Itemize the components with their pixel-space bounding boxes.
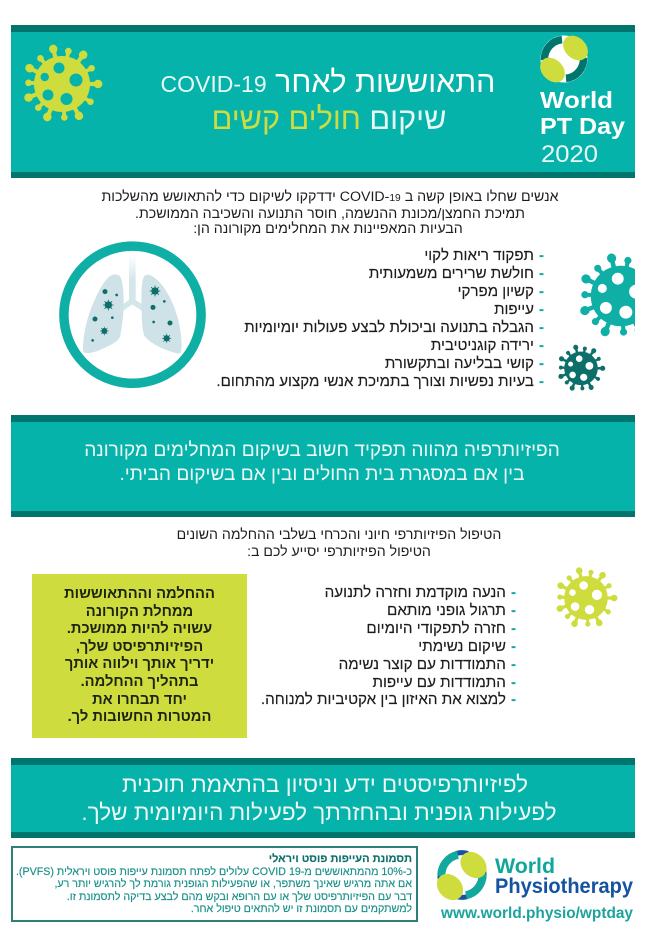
list: typical problems: [216, 247, 544, 390]
icon: yellow virus: [24, 44, 102, 122]
text block: introduction: תמיכת החמצן/מכונת ההנשמה, חוסר התנועה והשכיבה הממושכת.: [135, 206, 525, 222]
text block: physiotherapy is vital: הטיפול הפיזיותרפי יסייע לכם ב:: [247, 543, 431, 559]
list: typical problems: -קשיון מפרקי: [458, 283, 544, 300]
callout text: ידריך אותך וילווה אותך: [65, 656, 214, 672]
note heading: תסמונת העייפות פוסט ויראלי: [269, 853, 412, 865]
list: how physiotherapy helps: -התמודדות עם קוצר נשימה: [339, 656, 516, 673]
callout: green recovery box: [32, 574, 247, 738]
logo: World PT Day 2020: 2020: [541, 141, 598, 168]
list: how physiotherapy helps: -חזרה לתפקודי היומיום: [366, 620, 516, 637]
text: physiotherapy role statement: הפיזיותרפיה מהווה תפקיד חשוב בשיקום המחלימים מקורונה: [84, 440, 560, 461]
note body: כ-10% מהמתאוששים מ-19 COVID עלולים לפתח תסמונת עייפות פוסט ויראלית (PVFS).: [16, 866, 412, 878]
callout text: ממחלת הקורונה: [86, 604, 193, 620]
callout text: הפיזיותרפיסט שלך,: [76, 639, 203, 655]
title line: recovery after COVID-19: התאוששות לאחר COVID-19: [161, 65, 495, 99]
logo: World Physiotherapy: [436, 850, 633, 922]
logo: World PT Day 2020: [540, 36, 625, 168]
list: typical problems: -קושי בבליעה ובתקשורת: [385, 355, 544, 372]
list: typical problems: -הגבלה בתנועה וביכולת לבצע פעולות יומיומיות: [244, 319, 544, 336]
text block: introduction: [101, 189, 559, 237]
callout text: [64, 586, 215, 725]
text: physiotherapy role statement: בין אם במסגרת בית החולים ובין אם בשיקום הביתי.: [119, 464, 525, 484]
logo: World PT Day 2020: World: [540, 87, 613, 113]
text: physiotherapy role statement: [84, 440, 560, 484]
icon: lungs in a circle: [59, 241, 206, 388]
callout text: יחד תבחרו את: [92, 692, 187, 708]
panel: header band: [11, 25, 635, 178]
list: typical problems: -חולשת שרירים משמעותית: [369, 265, 544, 282]
text block: physiotherapy is vital: [177, 526, 501, 559]
list: how physiotherapy helps: [261, 584, 516, 708]
logo: World PT Day 2020: PT Day: [540, 113, 625, 139]
list: how physiotherapy helps: -שיקום נשימתי: [418, 638, 516, 655]
text: knowledge statement: [81, 772, 557, 825]
text block: physiotherapy is vital: הטיפול הפיזיותרפי חיוני והכרחי בשלבי ההחלמה השונים: [177, 526, 501, 542]
list: typical problems: -בעיות נפשיות וצורך בתמיכת אנשי מקצוע מהתחום.: [216, 373, 544, 390]
logo: World Physiotherapy: www.world.physio/wptday: [440, 905, 633, 922]
logo: World Physiotherapy: World: [495, 855, 555, 878]
note body: אם אתה מרגיש שאינך משתפר, או שהפעילות הגופנית גורמת לך להרגיש יותר רע,: [54, 878, 412, 890]
text block: introduction: אנשים שחלו באופן קשה ב COVID-19 ידדקקו לשיקום כדי להתאושש מהשלכות: [101, 189, 559, 205]
list: how physiotherapy helps: -התמודדות עם עייפות: [372, 674, 516, 691]
note body: למשתקמים עם תסמונת זו יש להתאים טיפול אחר.: [191, 903, 412, 915]
logo: World Physiotherapy: Physiotherapy: [495, 875, 633, 898]
list: how physiotherapy helps: -תרגול גופני מותאם: [387, 602, 516, 619]
note body: דבר עם הפיזיותרפיסט שלך או עם הרופא ובקש מהם לבצע בדיקה לתסמונת זו.: [67, 891, 412, 903]
list: typical problems: -עייפות: [494, 301, 544, 318]
callout text: המטרות החשובות לך.: [68, 709, 211, 725]
note body: [16, 866, 412, 915]
list: typical problems: -תפקוד ריאות לקוי: [424, 247, 544, 264]
callout text: עשויה להיות ממושכת.: [67, 621, 212, 637]
icon: small yellow virus: [556, 567, 618, 628]
list: typical problems: -ירידה קוגניטיבית: [431, 337, 544, 354]
text: knowledge statement: לפיזיותרפיסטים ידע וניסיון בהתאמת תוכנית: [122, 772, 528, 797]
callout text: ההחלמה וההתאוששות: [64, 586, 215, 602]
panel: physiotherapy role band: [11, 415, 635, 517]
panel: physiotherapists knowledge band: [11, 758, 635, 838]
callout text: בתהליך ההחלמה.: [81, 674, 198, 690]
text: knowledge statement: לפעילות גופנית ובהחזרתך לפעילות היומיומית שלך.: [81, 800, 557, 825]
list: how physiotherapy helps: -למצוא את האיזון בין אקטיביות למנוחה.: [261, 691, 516, 708]
icon: teal virus: [580, 254, 635, 336]
list: how physiotherapy helps: -הנעה מוקדמת וחזרה לתנועה: [325, 584, 516, 601]
panel: post-viral fatigue syndrome note: [11, 846, 418, 922]
text block: introduction: הבעיות המאפיינות את המחלימים מקורונה הן:: [193, 221, 463, 237]
icon: dark virus: [558, 344, 606, 391]
title line: rehabilitation of severely ill patients: שיקום חולים קשים: [212, 102, 446, 136]
